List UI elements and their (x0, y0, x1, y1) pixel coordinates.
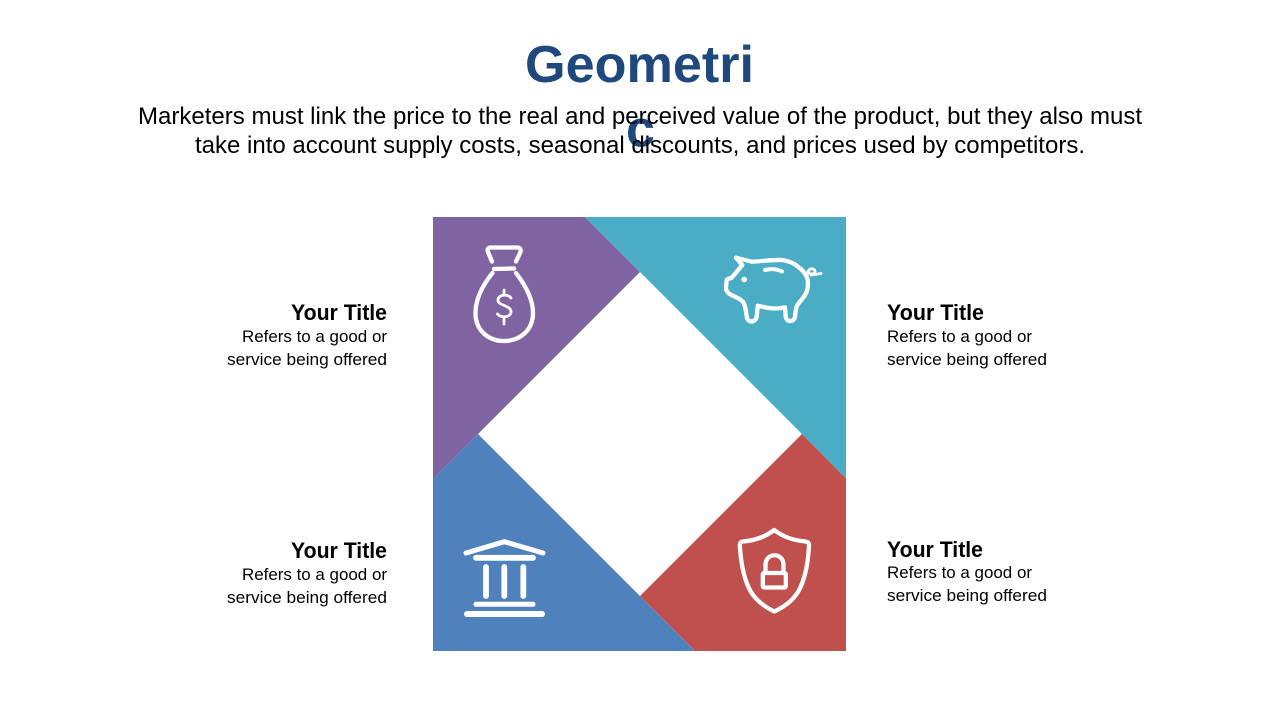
label: bottom left: Refers to a good or (242, 565, 387, 584)
label: bottom left (227, 538, 387, 607)
icon: piggy bank (726, 258, 821, 321)
label: top right (887, 300, 1047, 369)
label: bottom right: Refers to a good or (887, 563, 1032, 582)
panel: purple corner (433, 217, 640, 479)
label: bottom right: Your Title (887, 537, 983, 562)
panel: red corner (640, 434, 846, 651)
intro text: Marketers must link the price to the real and perceived value of the product, but they also must (138, 103, 1142, 130)
intro text: take into account supply costs, seasonal discounts, and prices used by competitors. (195, 132, 1085, 159)
label: top right: Your Title (887, 300, 984, 325)
label: bottom right (887, 537, 1047, 605)
label: bottom left: Your Title (291, 538, 387, 563)
title (525, 36, 754, 158)
label: bottom right: service being offered (887, 586, 1047, 605)
title: Geometri (525, 36, 754, 94)
label: bottom left: service being offered (227, 588, 387, 607)
panel: blue corner (433, 434, 695, 651)
title: c (626, 100, 655, 158)
label: top left: Refers to a good or (242, 327, 387, 346)
panel: teal corner (585, 217, 846, 478)
icon: bank building (466, 542, 543, 614)
label: top left: service being offered (227, 350, 387, 369)
label: top right: service being offered (887, 350, 1047, 369)
label: top left: Your Title (291, 300, 387, 325)
label: top right: Refers to a good or (887, 327, 1032, 346)
icon: money bag (476, 248, 533, 341)
icon: shield with padlock (740, 530, 809, 612)
label: top left (227, 300, 387, 369)
intro text (138, 103, 1142, 159)
